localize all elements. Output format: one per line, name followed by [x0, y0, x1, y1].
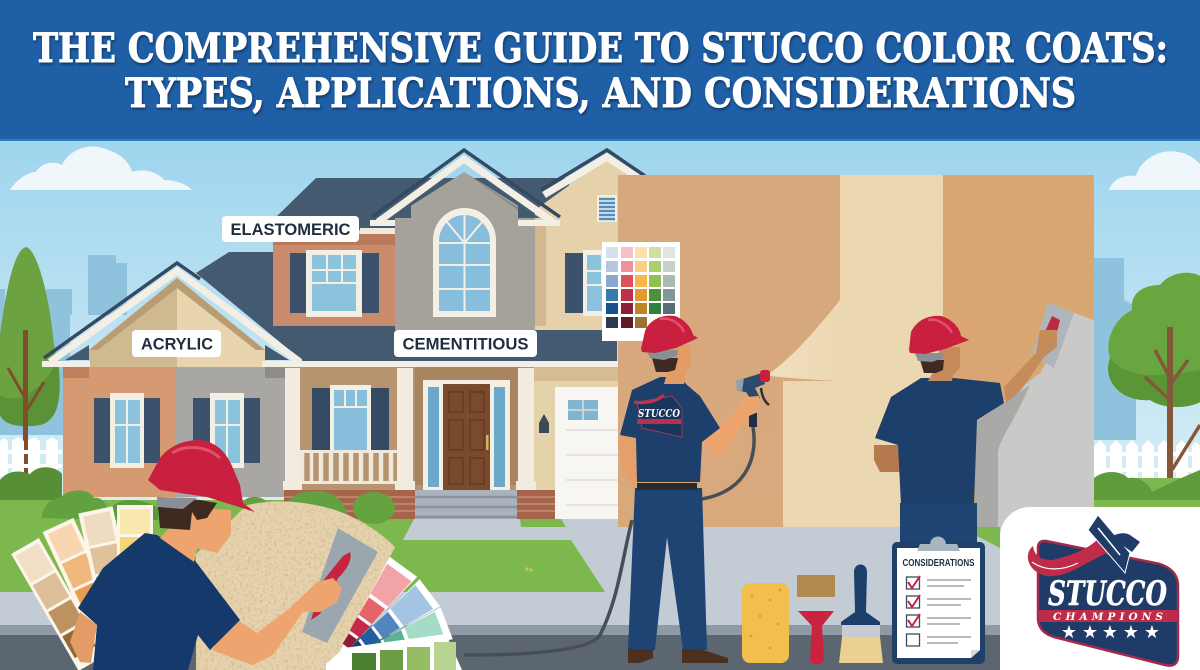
house	[0, 150, 1200, 670]
red swoosh	[1028, 537, 1108, 576]
left tree	[0, 247, 60, 480]
shirt logo: STUCCO	[638, 407, 680, 420]
label: cementitious	[394, 330, 537, 357]
central grey gable	[370, 150, 560, 330]
bottom-left worker with samples	[11, 440, 395, 670]
left arm	[618, 436, 637, 490]
title banner	[0, 0, 1200, 141]
left gable	[42, 263, 618, 367]
shirt	[620, 377, 720, 482]
considerations clipboard	[892, 536, 985, 664]
head	[928, 347, 960, 381]
colour swatch chart	[602, 242, 680, 341]
brick base	[284, 490, 555, 519]
navy shirt	[78, 533, 240, 670]
left arm	[874, 445, 900, 472]
worker spraying	[618, 316, 770, 663]
cool colour sample fan	[326, 557, 462, 670]
stucco wall panel with three finishes	[618, 175, 1094, 527]
left arm	[70, 612, 97, 663]
trousers	[900, 503, 977, 563]
shrubs	[0, 467, 395, 524]
Stucco Champions logo	[1000, 507, 1200, 670]
spray fan	[770, 300, 840, 381]
head and neck	[664, 345, 691, 384]
tool: red brush	[797, 575, 835, 664]
considerations clipboard: CONSIDERATIONS	[902, 558, 975, 569]
spray hose	[464, 427, 754, 655]
label: elastomeric: ELASTOMERIC	[230, 221, 351, 239]
warm colour sample fan	[11, 505, 153, 670]
main slate roof	[196, 252, 617, 362]
right arm	[702, 395, 758, 457]
right picket fence	[1094, 440, 1200, 486]
label: cementitious: CEMENTITIOUS	[402, 336, 528, 354]
lawn, walkway, sidewalk and road	[0, 500, 1010, 670]
arched window	[433, 208, 496, 317]
worker troweling	[874, 302, 1074, 563]
tool: blue brush	[839, 564, 883, 663]
spray gun	[736, 370, 770, 427]
five stars: ★	[1123, 622, 1139, 643]
checklist	[906, 576, 971, 646]
right gable wing	[535, 150, 645, 330]
wall lantern	[539, 414, 549, 433]
raised arm	[1004, 330, 1057, 403]
steel trowel	[302, 528, 378, 643]
forearm and hand	[212, 578, 342, 665]
upper slate roof	[275, 178, 590, 230]
red hard hat	[641, 316, 698, 353]
trowel	[1032, 302, 1074, 368]
front steps	[415, 490, 517, 519]
background scene: sky, clouds, skyline	[0, 141, 1200, 501]
badge: CHAMPIONS	[1053, 611, 1163, 623]
title: TYPES, APPLICATIONS, AND CONSIDERATIONS	[125, 70, 1076, 117]
tool: sponge	[742, 583, 789, 663]
shirt	[875, 378, 1004, 505]
five stars: ★	[1061, 622, 1077, 643]
label: acrylic	[132, 330, 221, 357]
red band	[1039, 610, 1177, 622]
right tree	[1108, 273, 1200, 480]
porch columns	[283, 368, 536, 490]
boots	[628, 649, 728, 663]
trousers	[628, 488, 707, 650]
right lawn strip and bushes	[1094, 470, 1200, 508]
garage door	[555, 387, 625, 519]
label: elastomeric	[222, 216, 359, 242]
head and neck	[160, 508, 231, 562]
red hard hat	[148, 440, 255, 512]
title	[33, 25, 1168, 117]
trowel mark	[1088, 515, 1140, 573]
base coat	[975, 313, 1094, 527]
hand on gun	[744, 396, 759, 416]
textured stucco sample	[195, 501, 395, 670]
front door and frame	[423, 380, 510, 490]
belt	[637, 483, 697, 490]
porch window	[312, 385, 389, 451]
five stars: ★	[1144, 622, 1160, 643]
left picket fence	[0, 437, 62, 477]
lower storey walls	[63, 367, 625, 519]
five stars	[1061, 622, 1160, 643]
five stars: ★	[1082, 622, 1098, 643]
porch railing	[299, 450, 399, 484]
label: acrylic: ACRYLIC	[141, 336, 213, 354]
window with shutters, left	[94, 393, 160, 468]
shirt logo	[634, 395, 682, 437]
window with shutters, middle	[193, 393, 260, 468]
elastomeric upper wall	[273, 228, 395, 326]
five stars: ★	[1102, 622, 1118, 643]
red hard hat	[909, 316, 969, 354]
badge	[1028, 515, 1178, 666]
